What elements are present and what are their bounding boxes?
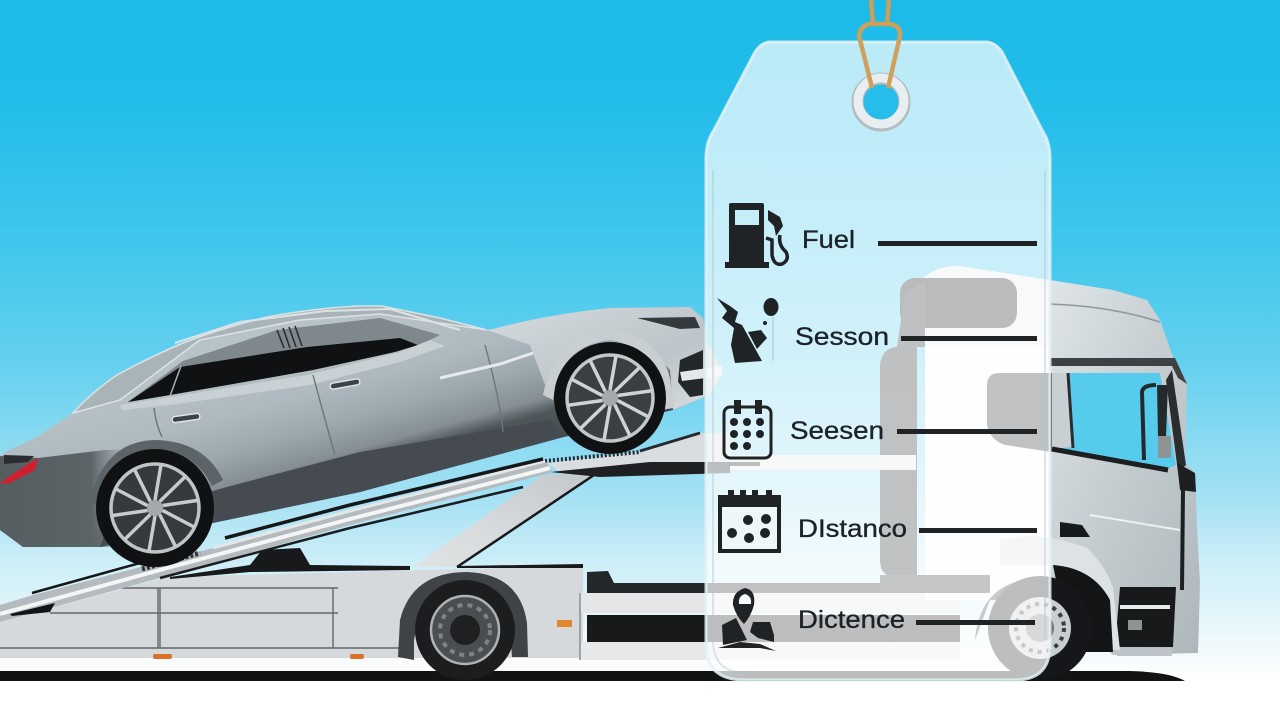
row: dictence — [718, 588, 1035, 651]
row: seesen — [724, 400, 1037, 458]
car rear wheel — [90, 440, 223, 567]
car body — [0, 306, 723, 547]
car — [0, 306, 723, 567]
truck cab — [880, 266, 1200, 680]
icon: calendar outline — [724, 400, 771, 458]
car sill — [100, 420, 560, 547]
ramp support strut — [413, 472, 597, 567]
cab window — [1052, 370, 1186, 472]
icon: fuel pump — [725, 203, 787, 268]
car headlight and grille — [637, 317, 722, 397]
dark deck edge — [170, 548, 583, 579]
ramp upper wedge — [547, 433, 730, 472]
ramp beam — [550, 462, 730, 477]
cab front wheel — [975, 576, 1092, 680]
car hood — [487, 307, 723, 410]
car tail light — [1, 458, 38, 484]
row: fuel — [725, 203, 1037, 268]
car roof rail — [73, 306, 487, 413]
cab roof line — [1050, 304, 1160, 322]
label: Fuel: Fuel — [802, 226, 855, 254]
label: Seesen: Seesen — [790, 417, 884, 445]
row: season — [717, 298, 1037, 363]
glass price tag — [706, 0, 1050, 680]
trailer wheel — [398, 572, 528, 680]
truck trailer bed — [0, 548, 960, 680]
trailer compartments — [153, 571, 960, 660]
icon: calendar solid — [718, 490, 781, 553]
icon: map pin — [718, 588, 776, 651]
car front wheel — [543, 330, 674, 454]
loading ramp — [0, 433, 916, 622]
label: DIstanco: DIstanco — [798, 515, 907, 543]
ground shadow — [0, 671, 1185, 681]
label: Dictence: Dictence — [798, 606, 905, 634]
car rear quarter — [0, 450, 130, 547]
cab sleeper and fairing — [880, 266, 1200, 655]
icon: season marker — [717, 298, 778, 363]
row: distance — [718, 490, 1037, 553]
car window glass — [120, 309, 460, 410]
tag string — [859, 0, 900, 88]
tag eyelet ring — [861, 82, 901, 122]
label: Sesson: Sesson — [795, 323, 889, 351]
cab lower details — [1000, 463, 1196, 656]
car door lines and handles — [154, 345, 533, 455]
ramp main rail — [0, 461, 553, 622]
